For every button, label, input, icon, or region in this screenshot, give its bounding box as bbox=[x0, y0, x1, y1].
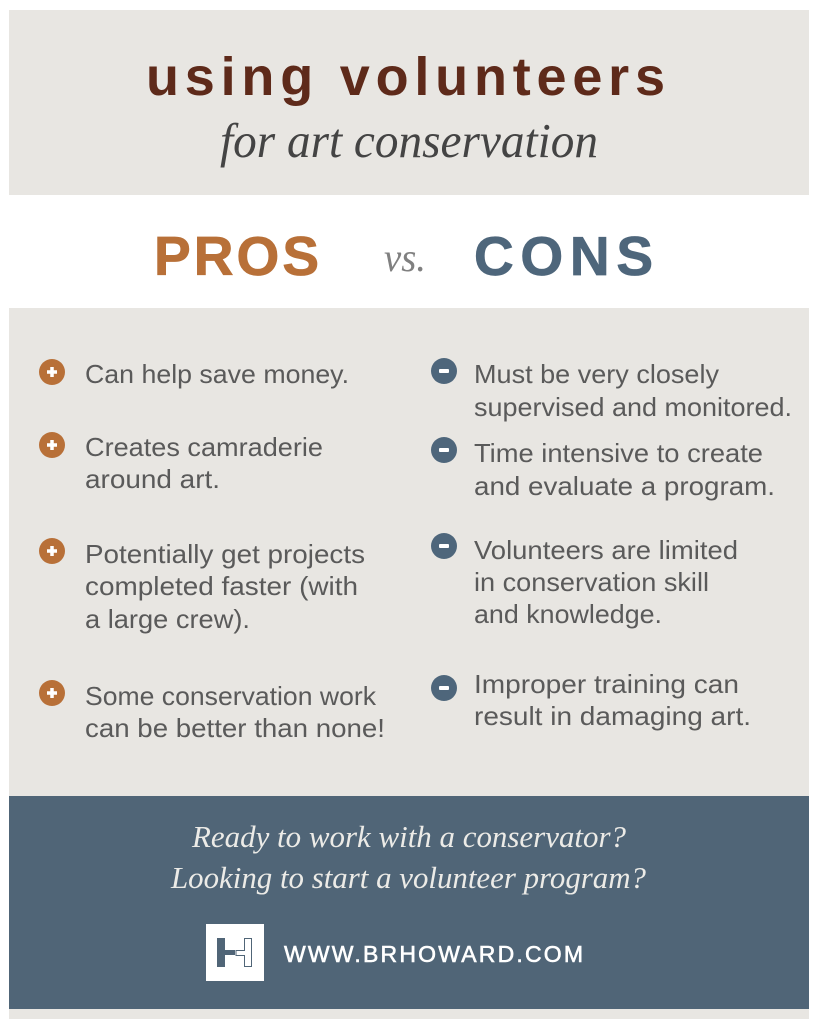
con item 2 bbox=[431, 437, 775, 501]
footer question 1: Ready to work with a conservator? bbox=[191, 819, 626, 854]
pro item 2: around art. bbox=[85, 464, 220, 494]
panel: lists bbox=[9, 308, 809, 796]
panel: footer bbox=[9, 796, 809, 1009]
cons heading: CONS bbox=[474, 225, 653, 287]
con item 3: and knowledge. bbox=[474, 599, 662, 629]
icon: logo bbox=[206, 924, 264, 981]
con item 2: Time intensive to create bbox=[474, 438, 763, 468]
con item 1: supervised and monitored. bbox=[474, 392, 792, 422]
panel: header bbox=[9, 10, 809, 195]
website url: WWW.BRHOWARD.COM bbox=[284, 941, 583, 967]
bottom strip bbox=[9, 1009, 809, 1019]
pro item 4 bbox=[39, 680, 385, 743]
cons list bbox=[431, 358, 792, 731]
con item 4: Improper training can bbox=[474, 669, 739, 699]
pro item 3: completed faster (with bbox=[85, 571, 358, 601]
pro item 3 bbox=[39, 538, 365, 634]
footer question 2: Looking to start a volunteer program? bbox=[170, 860, 646, 895]
pro item 3: Potentially get projects bbox=[85, 539, 365, 569]
pro item 3: a large crew). bbox=[85, 604, 250, 634]
pro item 2 bbox=[39, 432, 323, 494]
con item 1 bbox=[431, 358, 792, 422]
title: using volunteers bbox=[146, 47, 665, 107]
con item 4 bbox=[431, 669, 751, 731]
subtitle: for art conservation bbox=[220, 113, 598, 168]
con item 3 bbox=[431, 533, 738, 629]
con item 3: Volunteers are limited bbox=[474, 535, 738, 565]
pro item 4: can be better than none! bbox=[85, 713, 385, 743]
pros list bbox=[39, 359, 385, 743]
pro item 1: Can help save money. bbox=[85, 359, 349, 389]
versus label: vs. bbox=[384, 235, 426, 280]
con item 3: in conservation skill bbox=[474, 567, 709, 597]
pro item 4: Some conservation work bbox=[85, 681, 377, 711]
con item 4: result in damaging art. bbox=[474, 701, 751, 731]
con item 1: Must be very closely bbox=[474, 359, 719, 389]
pro item 2: Creates camraderie bbox=[85, 432, 323, 462]
con item 2: and evaluate a program. bbox=[474, 471, 775, 501]
pros heading: PROS bbox=[154, 225, 319, 287]
